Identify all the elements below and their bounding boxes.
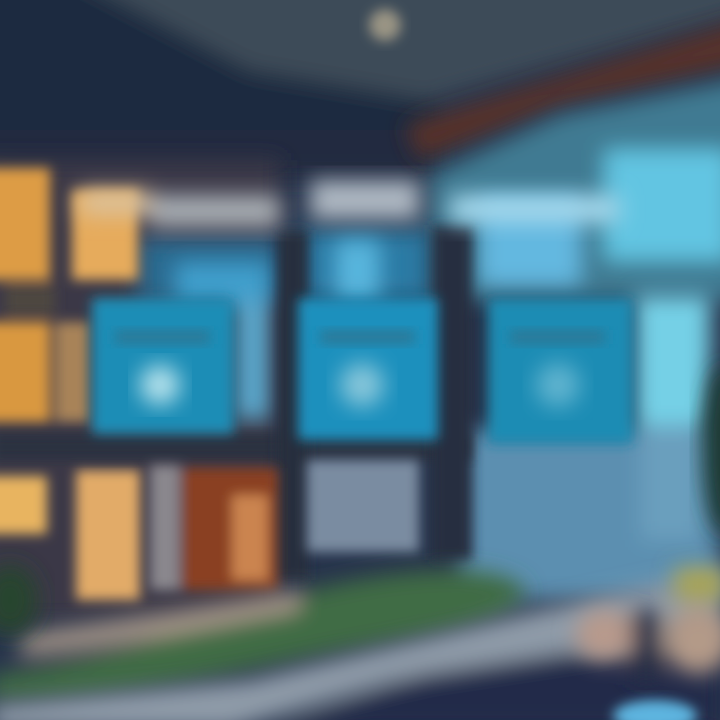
blurred heading text bands <box>80 180 620 227</box>
bottom right furniture <box>575 568 720 680</box>
card 1 icon <box>140 365 180 405</box>
warm windows left <box>0 168 140 600</box>
bottom cyan highlight <box>613 700 697 720</box>
card 2 icon <box>340 363 384 407</box>
lower middle windows <box>150 460 419 590</box>
blue card 3 <box>488 298 633 444</box>
plant right <box>703 365 720 535</box>
left wall base <box>0 160 430 620</box>
right side window and lower glazing <box>460 295 720 600</box>
card 1 title band <box>115 330 210 344</box>
blue card 1 <box>92 298 234 434</box>
roof beam <box>405 15 720 160</box>
ceiling and upper wall <box>0 0 720 180</box>
dark horizontal floor band <box>0 434 470 460</box>
lawn <box>0 570 525 700</box>
shrub left <box>0 565 38 635</box>
card 2 title band <box>320 330 415 344</box>
ceiling light <box>369 9 401 41</box>
card 3 icon <box>536 363 580 407</box>
upper right glazing <box>430 75 720 300</box>
pale path and road <box>0 570 720 720</box>
upper blue glow spots <box>175 240 380 420</box>
dark building columns <box>278 225 472 580</box>
card 3 title band <box>510 330 605 344</box>
blue card 2 <box>298 298 438 440</box>
